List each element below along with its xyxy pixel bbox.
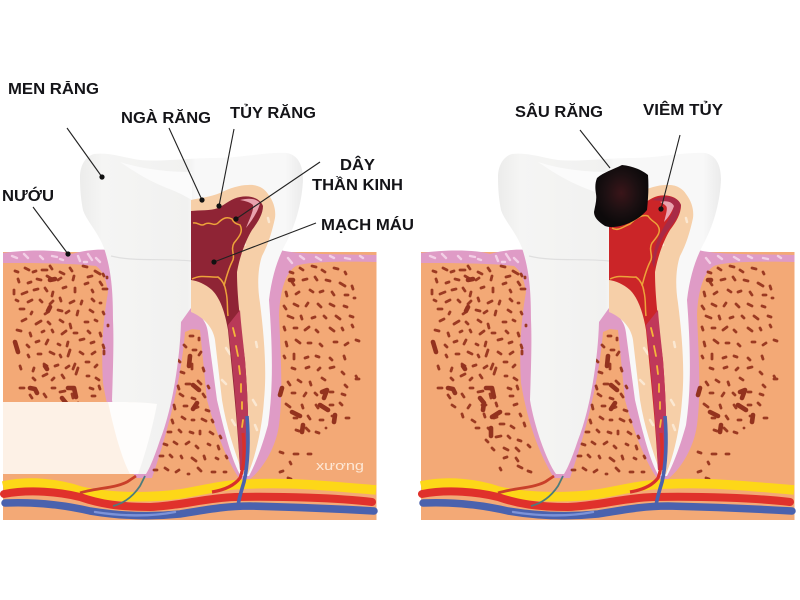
panel: tooth with pulpitis bbox=[421, 153, 794, 520]
label: men răng bbox=[8, 81, 105, 180]
label: men răng: MEN RĂNG bbox=[8, 81, 99, 98]
cavity: black decay bbox=[594, 165, 648, 227]
pulp: inflamed bright red bbox=[609, 195, 681, 470]
label: sâu răng: SÂU RĂNG bbox=[515, 103, 603, 121]
label: sâu răng bbox=[515, 103, 610, 168]
label: viêm tủy: VIÊM TỦY bbox=[643, 101, 724, 119]
blood vessels and nerve in canal bbox=[630, 328, 666, 506]
label: mạch máu: MẠCH MÁU bbox=[321, 217, 414, 234]
patch: tooth part bbox=[108, 402, 157, 474]
label: xương: xương bbox=[316, 458, 364, 473]
label: ngà răng: NGÀ RĂNG bbox=[121, 110, 211, 127]
label: dây thần kinh bbox=[233, 156, 403, 222]
label: nướu bbox=[2, 187, 71, 257]
panel: healthy tooth cross-section bbox=[3, 153, 376, 520]
label: ngà răng bbox=[121, 110, 211, 203]
label: dây thần kinh: DÂY bbox=[340, 156, 376, 174]
label: viêm tủy bbox=[643, 101, 724, 212]
white retouch patch bbox=[3, 402, 155, 474]
label: dây thần kinh: THẦN KINH bbox=[312, 177, 403, 194]
label: tủy răng: TỦY RĂNG bbox=[230, 104, 316, 122]
label: mạch máu bbox=[211, 217, 414, 265]
nerve fibres bbox=[192, 218, 241, 316]
label: nướu: NƯỚU bbox=[2, 187, 54, 205]
pulp: healthy dark red chamber and canal bbox=[191, 196, 263, 470]
nerve fibres bbox=[610, 215, 659, 316]
blood vessels and nerve in canal bbox=[212, 328, 248, 506]
label: tủy răng bbox=[216, 104, 316, 209]
